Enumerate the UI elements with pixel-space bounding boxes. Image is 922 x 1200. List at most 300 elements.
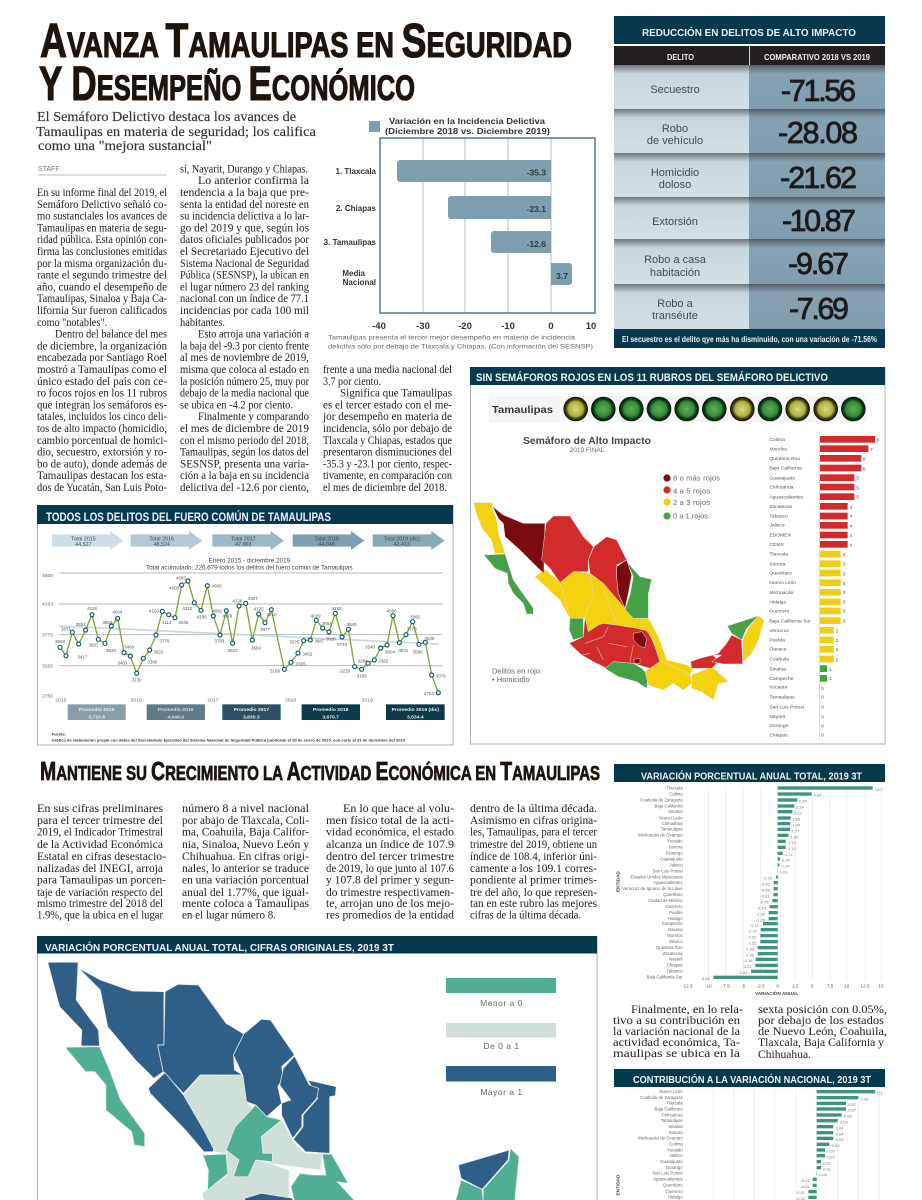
- ranking of states by red lights: Colima: [769, 437, 785, 443]
- horizontal bar chart by state: Colima: [669, 791, 683, 796]
- ranking of states by red lights: 7: [870, 447, 873, 453]
- monthly line chart: 4064: [112, 609, 123, 614]
- article text: actividad económica: 2019, el Indicador Trimestral: [37, 827, 163, 839]
- legend and chart title: [369, 116, 550, 136]
- ranking of states by red lights: Hidalgo: [769, 600, 786, 606]
- monthly line chart: 4081: [212, 609, 223, 614]
- horizontal bar chart by state: -1.15: [757, 905, 767, 910]
- ranking of states by red lights: Chiapas: [769, 733, 788, 739]
- ranking of states by red lights: 0: [821, 714, 824, 720]
- horizontal bar chart by state: San Luis Potosí: [652, 868, 683, 873]
- monthly line chart: 3864: [102, 620, 113, 625]
- article text: seguridad: el lugar número 23 del ranking: [180, 280, 309, 293]
- article text: actividad económica: En sus cifras preliminares: [37, 803, 164, 815]
- horizontal bar chart by state: 0: [776, 983, 779, 988]
- article text: seguridad: Semáforo Delictivo señaló co-: [37, 198, 167, 211]
- monthly line chart: 3265: [42, 664, 53, 670]
- horizontal bar chart by state: Sinaloa: [668, 1124, 683, 1129]
- article text: actividad económica: de la Actividad Económica: [37, 839, 163, 851]
- horizontal bar chart by state: 0.06: [844, 1114, 853, 1119]
- axis labels: -40: [372, 321, 386, 332]
- article text: seguridad: tos de alto impacto (homicidio,: [37, 422, 167, 435]
- ranking of states by red lights: 2: [836, 657, 839, 663]
- horizontal bar chart by state: 1.77: [792, 828, 800, 833]
- delito names: doloso: [659, 179, 691, 191]
- horizontal bar chart by state: Tamaulipas: [661, 1118, 683, 1123]
- article text: seguridad: Esto arroja una variación a: [198, 328, 309, 341]
- article text: actividad económica: Estatal en cifras desestacio-: [37, 851, 166, 863]
- horizontal bar chart by state: -0.75: [759, 899, 769, 904]
- delito names: [644, 84, 707, 322]
- ranking of states by red lights: Tlaxcala: [769, 552, 788, 558]
- subheading: Tamaulipas en materia de seguridad; los califica: [36, 125, 317, 140]
- bar values: 3.7: [556, 271, 568, 281]
- horizontal bar chart by state: -1.28: [756, 917, 766, 922]
- chart caption: [328, 334, 593, 350]
- chart subtitle: Total acumulado: 226,679 todos los delitos del fuero común de Tamaulipas: [146, 564, 353, 571]
- horizontal bar chart by state: Yucatán: [667, 839, 683, 844]
- article text: contribución: actividad económica, Ta-: [613, 1037, 740, 1049]
- article text: actividad económica: y 107.8 del primer y segun-: [326, 874, 454, 886]
- horizontal bar chart by state: 1.13: [788, 846, 797, 851]
- article text: seguridad: dos de Yucatán, San Luis Poto-: [37, 481, 167, 494]
- yearly averages: 4,044.0: [167, 714, 184, 720]
- axis labels: [372, 321, 596, 332]
- yearly averages: 3,710.6: [88, 714, 105, 720]
- article text: seguridad: bo de auto), donde además de: [37, 457, 167, 470]
- article text: seguridad: En su informe final del 2019, el: [37, 186, 167, 199]
- monthly line chart: 3521: [153, 649, 164, 654]
- ranking of states by red lights: Chihuahua: [769, 484, 794, 490]
- comparison values: -21.62: [780, 161, 857, 195]
- horizontal bar chart by state: Jalisco: [669, 1153, 683, 1158]
- article text: actividad económica: dentro del tercer trimestre: [326, 851, 454, 863]
- monthly line chart: 3540: [365, 644, 375, 649]
- article text: seguridad: ridad pública. Esta opinión con-: [37, 233, 167, 246]
- horizontal bar chart by state: 0.04: [836, 1137, 844, 1142]
- ranking of states by red lights: Guanajuato: [769, 475, 795, 481]
- ranking of states by red lights: 1: [829, 676, 832, 682]
- byline: staff: [38, 166, 167, 176]
- monthly line chart: 3623: [228, 648, 238, 653]
- monthly line chart: 4114: [162, 620, 172, 625]
- map of Mexico by red lights: [473, 503, 764, 700]
- monthly line chart: 4307: [248, 596, 258, 601]
- horizontal bar chart by state: Campeche: [662, 921, 683, 926]
- article text: seguridad: dio, secuestro, extorsión y ro-: [37, 446, 167, 459]
- article text: actividad económica: les, Tamaulipas, para el tercer: [470, 827, 597, 839]
- chart heading: VARIACIÓN PORCENTUAL ANUAL TOTAL, 2019 3T: [641, 770, 863, 782]
- horizontal bar chart by state: 0.34: [782, 858, 791, 863]
- ranking of states by red lights: 3: [843, 581, 846, 587]
- article text: actividad económica: tre del año, lo que represen-: [470, 887, 597, 899]
- article text: actividad económica: En lo que hace al volu-: [343, 803, 454, 815]
- comparison values: -9.67: [788, 247, 849, 281]
- horizontal bar chart by state: 0.01: [823, 1166, 832, 1171]
- monthly line chart: 3468: [124, 644, 134, 649]
- monthly line chart: 3871: [61, 627, 71, 632]
- map legend: 2 a 3 rojos: [673, 498, 710, 507]
- monthly line chart: 4118: [87, 606, 97, 611]
- bar labels: Nacional: [343, 278, 376, 287]
- horizontal bar chart by state: San Luis Potosí: [652, 1171, 683, 1176]
- monthly line chart: 4029: [311, 614, 321, 619]
- horizontal bar chart by state: Baja California: [655, 803, 683, 808]
- horizontal bar chart by state: Tlaxcala: [667, 785, 683, 790]
- monthly line chart: 4096: [387, 608, 397, 613]
- yearly total arrows: 44,527: [75, 542, 92, 548]
- ranking of states by red lights: 1: [829, 667, 832, 673]
- horizontal bar chart by state: 0.04: [836, 1131, 844, 1136]
- article text: seguridad: encabezada por Santiago Roel: [37, 351, 167, 364]
- horizontal bar chart by state: -10: [705, 983, 712, 988]
- monthly line chart: 3284: [358, 658, 368, 663]
- horizontal bar chart by state: 2.12: [794, 811, 803, 816]
- monthly line chart: 4178: [222, 613, 233, 618]
- article text: actividad económica: 1.9%, que la ubica en el lugar: [37, 910, 163, 922]
- monthly line chart: 3362: [378, 658, 389, 663]
- legend and chart title: (Diciembre 2018 vs. Diciembre 2019): [385, 126, 550, 136]
- horizontal bar chart by state: 0.07: [848, 1108, 857, 1113]
- ranking of states by red lights: 2: [836, 628, 839, 634]
- article text: actividad económica: nia, Sinaloa, Nuevo León y: [182, 839, 309, 851]
- horizontal bar chart by state: Chihuahua: [662, 821, 683, 826]
- horizontal bar chart by state: 0.00: [819, 1172, 828, 1177]
- monthly line chart: 3630: [106, 648, 116, 653]
- ranking of states by red lights: 4: [850, 514, 853, 520]
- article text: actividad económica: camente a los 109.1 corres-: [470, 863, 597, 875]
- monthly line chart: 3773: [407, 627, 417, 632]
- map title: Semáforo de Alto Impacto: [523, 436, 651, 447]
- yearly averages: Promedio 2016: [158, 707, 194, 713]
- horizontal bar chart by state: -3.21: [743, 964, 753, 969]
- horizontal bar chart by state: -7.5: [722, 983, 730, 988]
- horizontal bar chart by state: 0.1: [877, 1091, 884, 1096]
- yearly total arrows: 48,524: [154, 542, 170, 548]
- article text: seguridad: delictiva del -12.6 por ciento,: [180, 481, 309, 494]
- horizontal bar chart by state: 4.89: [813, 793, 822, 798]
- bar labels: [324, 167, 377, 287]
- horizontal bar chart by state: -1.28: [756, 911, 766, 916]
- monthly line chart: 3849: [347, 622, 357, 627]
- horizontal bar chart by state: Jalisco: [669, 862, 683, 867]
- yearly total arrows: Total 2019 (dic): [383, 537, 420, 543]
- horizontal bar chart by state: -3.83: [738, 970, 748, 975]
- bar labels: 1. Tlaxcala: [336, 167, 377, 176]
- article text: seguridad: Sistema Nacional de Seguridad: [180, 257, 309, 270]
- map legend: [446, 978, 556, 1097]
- map title: [523, 436, 651, 454]
- horizontal bar chart by state: Sinaloa: [668, 809, 683, 814]
- monthly line chart: 4800: [42, 573, 53, 579]
- article text: seguridad: SESNSP, presenta una varia-: [180, 457, 309, 470]
- column headers: DELITO: [667, 52, 694, 62]
- horizontal bar chart by state: 0.71: [785, 852, 793, 857]
- article text: actividad económica: vidad económica, el estado: [326, 827, 454, 839]
- monthly line chart: 3851: [76, 622, 86, 627]
- monthly line chart: 3305: [296, 662, 306, 667]
- horizontal bar chart by state: Chihuahua: [662, 1112, 683, 1117]
- ranking of states by red lights: Nuevo León: [769, 580, 796, 586]
- source note: Fuente:: [52, 732, 66, 737]
- title: [39, 15, 572, 111]
- monthly line chart: 2018: [285, 698, 296, 704]
- map legend: Mayor a 1: [480, 1087, 523, 1097]
- ranking of states by red lights: Guerrero: [769, 609, 790, 615]
- horizontal bar chart by state: -2.90: [745, 952, 755, 957]
- bar labels: Media: [342, 269, 366, 278]
- article text: actividad económica: pondiente al primer trimes-: [470, 874, 597, 886]
- monthly line chart: 3229: [340, 669, 350, 674]
- article text: actividad económica: en una variación porcentual: [182, 874, 309, 886]
- article text: seguridad: incidencia, sólo por debajo de: [323, 422, 452, 435]
- yearly total arrows: Total 2015: [71, 537, 96, 543]
- ranking of states by red lights: 4: [850, 542, 853, 548]
- yearly averages: [68, 704, 445, 720]
- monthly line chart: 4158: [332, 606, 342, 611]
- monthly line chart: 3828: [326, 637, 336, 642]
- ranking of states by red lights: Tabasco: [769, 514, 788, 520]
- map legend: De 0 a 1: [483, 1041, 520, 1051]
- delito names: de vehículo: [647, 135, 703, 147]
- horizontal bar chart by state: [616, 785, 884, 996]
- subheading: como una "mejora sustancial": [38, 139, 212, 154]
- ranking of states by red lights: [769, 435, 880, 739]
- article text: seguridad: con el mismo periodo del 2018,: [180, 434, 309, 447]
- horizontal bar chart by state: Veracruz de Ignacio de la Llave: [622, 886, 683, 891]
- title: Y DESEMPEÑO ECONÓMICO: [39, 58, 415, 111]
- horizontal bar chart by state: 2.84: [799, 799, 808, 804]
- monthly line chart: 3403: [117, 660, 128, 665]
- horizontal bar chart by state: -0.58: [761, 887, 771, 892]
- article text: seguridad: frente a una media nacional del: [323, 363, 452, 376]
- ranking of states by red lights: Morelos: [769, 446, 788, 452]
- yearly averages: Promedio 2017: [234, 707, 269, 713]
- panel heading: VARIACIÓN PORCENTUAL ANUAL TOTAL, CIFRAS ORIGINALES, 2019 3T: [45, 941, 395, 954]
- horizontal bar chart by state: 0.04: [836, 1125, 844, 1130]
- yearly total arrows: 47,963: [235, 542, 252, 548]
- article text: seguridad: Tlaxcala y Chiapas, estados que: [323, 434, 452, 447]
- subheading: [36, 110, 317, 154]
- panel heading: SIN SEMÁFOROS ROJOS EN LOS 11 RUBROS DEL SEMÁFORO DELICTIVO: [476, 371, 828, 384]
- article text: seguridad: la baja del -9.3 por ciento frente: [180, 339, 309, 352]
- article text: seguridad: Tamaulipas en materia de segu-: [37, 221, 167, 234]
- horizontal bar chart by state: Michoacán de Ocampo: [638, 833, 683, 838]
- bar values: -35.3: [527, 168, 546, 178]
- article text: actividad económica: Chihuahua. En cifras origi-: [182, 851, 309, 863]
- horizontal bar chart by state: 1.86: [792, 817, 801, 822]
- traffic lights row: Tamaulipas: [492, 404, 553, 416]
- map of Mexico by annual variation: [48, 962, 519, 1200]
- ranking of states by red lights: San Luis Potosí: [769, 704, 805, 710]
- monthly line chart: 4228: [232, 599, 243, 604]
- yearly averages: 3,534.4: [407, 714, 424, 720]
- article text: actividad económica: nales, lo anterior se traduce: [182, 863, 309, 875]
- article text: seguridad: Tamaulipas, según los datos del: [180, 446, 309, 459]
- horizontal bar chart by state: Puebla: [669, 910, 683, 915]
- article text: seguridad: incidencias por cada 100 mil: [180, 304, 309, 317]
- ranking of states by red lights: CDMX: [769, 542, 785, 548]
- delito names: Robo a casa: [644, 254, 707, 266]
- delito names: Homicidio: [651, 167, 699, 179]
- ranking of states by red lights: Oaxaca: [769, 647, 787, 653]
- horizontal bar chart by state: Querétaro: [663, 1183, 683, 1188]
- article text: actividad económica: cifras de la última década.: [470, 910, 581, 922]
- horizontal bar chart by state: Querétaro: [663, 892, 683, 897]
- article text: actividad económica: do trimestre respectivamen-: [326, 887, 454, 899]
- horizontal bar chart by state: 2.5: [792, 983, 799, 988]
- article text: actividad económica: trimestre del 2019, obtiene un: [470, 839, 597, 851]
- yearly averages: 3,830.3: [243, 714, 260, 720]
- monthly line chart: 2015: [55, 698, 67, 704]
- article text: seguridad: misma que coloca al estado en: [180, 363, 309, 376]
- ranking of states by red lights: 5: [856, 494, 859, 500]
- yearly total arrows: 42,413: [394, 542, 410, 548]
- horizontal bar chart by state: Chiapas: [667, 963, 683, 968]
- horizontal bar chart by state: -0.56: [761, 882, 771, 887]
- horizontal bar chart by state: Nayarit: [669, 957, 683, 962]
- monthly line chart: 2016: [131, 698, 142, 704]
- horizontal bar chart by state: 0.03: [780, 870, 788, 875]
- ranking of states by red lights: 4: [850, 533, 853, 539]
- ranking of states by red lights: Baja California Sur: [769, 618, 811, 624]
- article text: seguridad: su incidencia delictiva a lo lar-: [180, 210, 309, 223]
- article text: actividad económica: Asimismo en cifras origina-: [470, 815, 597, 827]
- horizontal bar chart by state: Durango: [666, 851, 683, 856]
- horizontal bar chart by state: -2.52: [747, 940, 757, 945]
- ranking of states by red lights: 8: [877, 437, 880, 443]
- monthly line chart: 3130: [132, 678, 142, 683]
- horizontal bar chart by state: -2.47: [748, 928, 758, 933]
- legend and chart title: Variación en la Incidencia Delictiva: [389, 116, 545, 126]
- horizontal bar chart by state: México: [669, 939, 683, 944]
- article text: seguridad: ción a la baja en su incidencia: [180, 469, 309, 482]
- chart caption: Tamaulipas presenta el tercer mejor desempeño en materia de incidencia: [328, 334, 575, 342]
- bar values: [527, 168, 568, 281]
- article text: seguridad: Tamaulipas destacan los esta-: [37, 469, 167, 482]
- monthly line chart: 3892: [322, 621, 332, 626]
- ranking of states by red lights: Durango: [769, 723, 789, 729]
- article text: seguridad: jor desempeño en materia de: [322, 410, 452, 423]
- article text: actividad económica: tan en este rubro las mejores: [470, 898, 598, 910]
- article text: seguridad: se ubica en -4.2 por ciento.: [180, 398, 293, 411]
- monthly line chart: 3733: [337, 642, 347, 647]
- traffic lights row: [489, 396, 867, 422]
- horizontal bar chart by state: -12.5: [682, 983, 693, 988]
- horizontal bar chart by state: -2.89: [745, 946, 755, 951]
- article text: actividad económica: de 2019, lo que junto al 107.6: [326, 863, 454, 875]
- horizontal bar chart by state: Yucatán: [667, 1147, 683, 1152]
- article text: seguridad: Pública (SESNSP), la ubican en: [180, 269, 309, 282]
- article text: seguridad: sí, Nayarit, Durango y Chiapas.: [180, 162, 308, 175]
- yearly averages: 3,670.7: [322, 714, 339, 720]
- map legend: 4 a 5 rojos: [673, 486, 710, 496]
- article text: seguridad: Tamaulipas, Sinaloa y Baja Ca-: [37, 292, 167, 305]
- article text: seguridad: año, cuando el desempeño de: [37, 280, 167, 293]
- horizontal bar chart by state: Coahuila de Zaragoza: [640, 1095, 683, 1100]
- article text: seguridad: mo sustanciales los avances de: [37, 210, 167, 223]
- article text: seguridad: 3.7 por ciento.: [323, 375, 381, 388]
- monthly line chart: 4045: [178, 620, 189, 625]
- article text: contribución: Finalmente, en lo rela-: [631, 1004, 743, 1016]
- monthly line chart: 3684: [251, 645, 261, 650]
- ranking of states by red lights: 3: [843, 562, 846, 568]
- ranking of states by red lights: 4: [850, 523, 853, 529]
- article text: seguridad: Dentro del balance del mes: [55, 328, 167, 341]
- horizontal bar chart by state: Aguascalientes: [653, 880, 683, 885]
- article text: actividad económica: ma, Coahuila, Baja Califor-: [182, 827, 309, 839]
- title: AVANZA TAMAULIPAS EN SEGURIDAD: [40, 15, 572, 68]
- monthly line chart: 4185: [197, 614, 207, 619]
- bar chart: variación en la incidencia delictiva: [324, 116, 596, 350]
- article text: seguridad: rante el segundo trimestre del: [37, 269, 167, 282]
- axis labels: -20: [458, 321, 472, 332]
- monthly line chart: 4283: [42, 602, 53, 608]
- comparison values: [778, 74, 858, 326]
- comparison values: -28.08: [778, 116, 858, 150]
- ranking of states by red lights: 3: [843, 609, 846, 615]
- article text: seguridad: nacional con un índice de 77.1: [180, 292, 309, 305]
- subheading: El Semáforo Delictivo destaca los avances de: [37, 110, 296, 125]
- horizontal bar chart by state: VARIACIÓN ANUAL: [755, 989, 798, 996]
- horizontal bar chart by state: 0.07: [848, 1102, 857, 1107]
- article text: actividad económica: nalizadas del INEGI, arroja: [37, 863, 163, 875]
- article text: seguridad: firma las conclusiones emitidas: [37, 245, 167, 258]
- ranking of states by red lights: Campeche: [769, 676, 794, 682]
- article text: actividad económica: dentro de la última década.: [470, 803, 597, 815]
- monthly line chart: 3462: [302, 652, 313, 657]
- monthly line chart: 3588: [413, 649, 423, 654]
- horizontal bar chart by state: Nuevo León: [659, 815, 683, 820]
- ranking of states by red lights: Jalisco: [769, 523, 785, 529]
- ranking of states by red lights: Yucatán: [769, 685, 788, 691]
- axis labels: 0: [548, 321, 554, 332]
- horizontal bar chart by state: Guanajuato: [660, 856, 683, 861]
- monthly line chart: 3995: [410, 614, 420, 619]
- monthly line chart: 3775: [42, 633, 53, 639]
- monthly line chart: 3681: [88, 643, 99, 648]
- article text: actividad económica: alcanza un índice de 107.9: [326, 839, 454, 851]
- yearly total arrows: Total 2018: [314, 537, 339, 543]
- ranking of states by red lights: 3: [843, 599, 846, 605]
- article text: actividad económica: para el tercer trimestre del: [37, 815, 163, 827]
- chart heading: CONTRIBUCIÓN A LA VARIACIÓN NACIONAL, 2019 3T: [633, 1073, 872, 1086]
- chart subtitle: [146, 558, 353, 571]
- horizontal bar chart by state: -0.61: [760, 893, 770, 898]
- article text: actividad económica: mismo trimestre del 2018 del: [37, 898, 163, 910]
- monthly line chart: 3783: [214, 639, 225, 644]
- horizontal bar chart by state: Baja California Sur: [647, 975, 683, 980]
- monthly line chart: 2750: [42, 693, 53, 699]
- horizontal bar chart by state: Quintana Roo: [656, 945, 683, 950]
- ranking of states by red lights: 0: [821, 723, 824, 729]
- delito names: Robo: [662, 123, 688, 135]
- horizontal bar chart by state: 0.24: [781, 864, 790, 869]
- yearly total arrows: Total 2017: [231, 537, 256, 543]
- horizontal bar chart by state: Guanajuato: [660, 1159, 683, 1164]
- map legend: Menor a 0: [480, 998, 523, 1008]
- ranking of states by red lights: Sonora: [769, 561, 786, 567]
- article text: contribución: [613, 1004, 887, 1061]
- monthly line chart: 3687: [314, 639, 325, 644]
- monthly line chart: 2019: [362, 698, 373, 704]
- article text: actividad económica: en el lugar número 8.: [182, 910, 276, 922]
- article text: actividad económica: mente coloca a Tamaulipas: [182, 898, 310, 910]
- comparison values: -7.69: [789, 292, 849, 326]
- horizontal bar chart by state: -3.15: [743, 958, 753, 963]
- panel: variación porcentual, cifras originales map: [37, 936, 597, 1200]
- column headers: COMPARATIVO 2018 VS 2019: [764, 52, 870, 62]
